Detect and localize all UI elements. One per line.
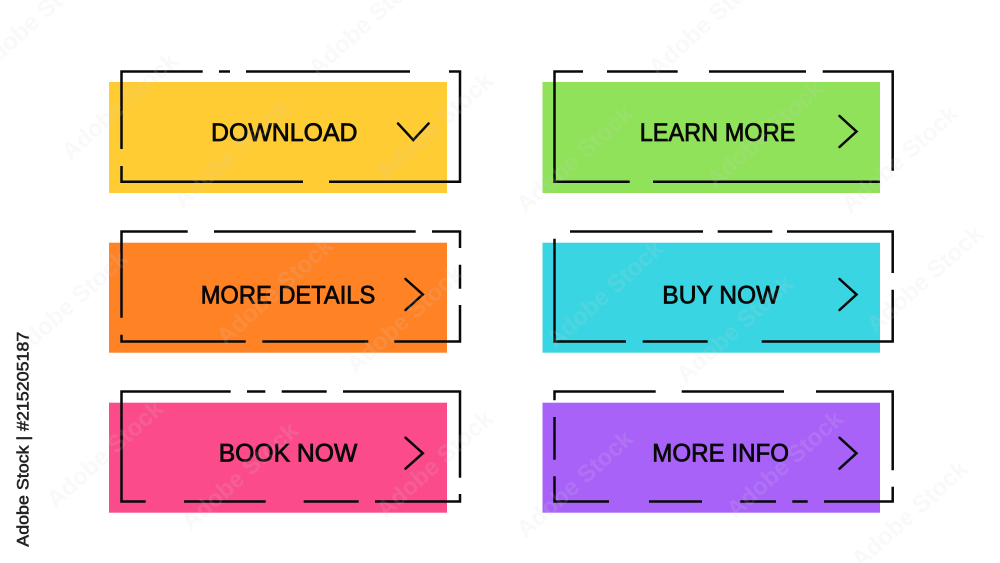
button: download [109, 72, 460, 193]
more details label: MORE DETAILS [201, 282, 375, 310]
download fill panel [109, 82, 447, 193]
learn more fill panel [542, 82, 880, 193]
watermarks: Adobe Stock [836, 100, 964, 219]
watermarks: Adobe Stock [721, 405, 849, 524]
learn more dashed frame [554, 72, 893, 182]
icon: chevron right [406, 279, 423, 310]
book now fill panel [109, 403, 447, 513]
button: more info [542, 392, 893, 513]
buy now dashed frame [554, 232, 893, 342]
button: book now [109, 392, 460, 513]
watermarks: Adobe Stock [541, 235, 669, 354]
more info label: MORE INFO [652, 439, 789, 467]
learn more label: LEARN MORE [640, 119, 795, 147]
watermarks: Adobe Stock [511, 425, 639, 544]
buy now fill panel [542, 243, 880, 353]
more details dashed frame [122, 232, 460, 342]
watermarks: Adobe Stock [41, 395, 169, 514]
more details fill panel [109, 243, 447, 353]
more info dashed frame [554, 392, 893, 502]
icon: chevron right [840, 279, 856, 310]
watermarks: Adobe Stock [371, 67, 499, 186]
icon: chevron down [398, 124, 429, 140]
watermarks: Adobe Stock [371, 405, 499, 524]
watermarks: Adobe Stock [6, 245, 134, 364]
more info fill panel [542, 403, 880, 513]
stock id side text: Adobe Stock | #215205187 [14, 332, 32, 547]
watermarks: Adobe Stock [56, 47, 184, 166]
book now label: BOOK NOW [219, 439, 358, 467]
button: buy now [542, 232, 893, 353]
watermarks: Adobe Stock [341, 260, 469, 379]
button: learn more [542, 72, 893, 193]
icon: chevron right [840, 116, 856, 147]
watermarks: Adobe Stock [671, 270, 799, 389]
icon: chevron right [406, 438, 423, 469]
book now dashed frame [122, 392, 460, 502]
watermarks: Adobe Stock [511, 100, 639, 219]
button: more details [109, 232, 460, 353]
watermarks: Adobe Stock [168, 95, 296, 214]
icon: chevron right [840, 438, 856, 469]
watermarks: Adobe Stock [211, 232, 339, 351]
watermarks: Adobe Stock [176, 417, 304, 536]
download label: DOWNLOAD [211, 119, 358, 147]
watermarks: Adobe Stock [861, 220, 989, 339]
buy now label: BUY NOW [662, 282, 780, 310]
watermarks: Adobe Stock [701, 75, 829, 194]
download dashed frame [122, 72, 460, 182]
